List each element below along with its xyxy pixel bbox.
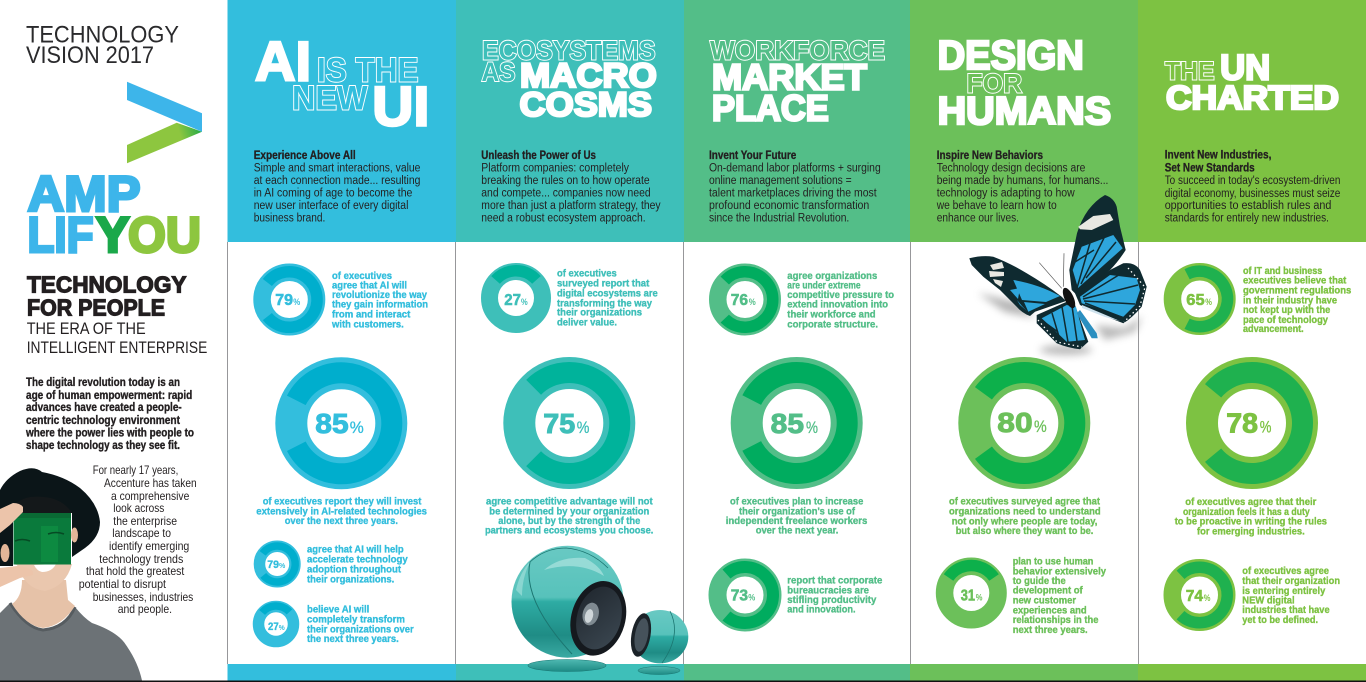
stat text: 78% bbox=[1175, 496, 1327, 537]
body paragraph wrapped around portrait: the enterprise bbox=[113, 514, 177, 528]
heading: technology for people: FOR PEOPLE bbox=[27, 295, 165, 321]
title: AI is the new UI: NEW bbox=[292, 79, 368, 117]
donut: 78% duty to be proactive bbox=[1181, 352, 1323, 494]
illustration: young man in hat holding green square bbox=[0, 468, 142, 680]
text: invent your future: profound economic transformation bbox=[709, 200, 869, 212]
stat text: 31%: new customer bbox=[1013, 595, 1076, 607]
body paragraph wrapped around portrait: a comprehensive bbox=[111, 489, 190, 503]
text: experience above all: business brand. bbox=[254, 213, 325, 225]
title: workforce marketplace: WORKFORCE bbox=[710, 35, 885, 65]
stat text: 27% ecosystems: of executives bbox=[557, 268, 617, 280]
stat text: 27% transform: their organizations over bbox=[307, 624, 414, 636]
panel header: workforce marketplace bbox=[684, 0, 910, 242]
intro statement: shape technology as they see fit. bbox=[26, 440, 180, 452]
stat text: 31%: to guide the bbox=[1013, 575, 1066, 587]
stat text: 31%: development of bbox=[1013, 585, 1083, 597]
donut: 65% government regulations: 65 bbox=[1186, 292, 1205, 309]
intro statement: centric technology environment bbox=[26, 415, 180, 427]
stat text: 75%: alone, but by the strength of the bbox=[498, 515, 640, 527]
donut: 65% government regulations bbox=[1162, 262, 1237, 336]
text: invent new industries: To succeed in today's ecosystem-driven bbox=[1165, 175, 1340, 187]
donut: 74% new digital industries: 74 bbox=[1186, 588, 1203, 605]
amplify you wordmark bbox=[28, 166, 201, 263]
stat text: 27% ecosystems: digital ecosystems are bbox=[557, 288, 658, 300]
body paragraph wrapped around portrait: potential to disrupt bbox=[79, 577, 167, 591]
stat text: 73%: bureaucracies are bbox=[787, 585, 869, 597]
text: invent new industries: Invent New Industries, bbox=[1165, 150, 1271, 162]
stat text: 85%: over the next year. bbox=[756, 525, 838, 537]
title: ecosystems as macrocosms: ECOSYSTEMS bbox=[482, 35, 656, 65]
text: inspire new behaviors: we behave to learn how to bbox=[936, 200, 1057, 212]
stat text: 79% adoption: adoption throughout bbox=[307, 564, 401, 576]
stat text: 76%: corporate structure. bbox=[787, 318, 878, 330]
donut: 27% digital ecosystems: 27 bbox=[504, 292, 521, 309]
body paragraph wrapped around portrait: For nearly 17 years, bbox=[93, 463, 178, 477]
title: the uncharted bbox=[1165, 47, 1339, 117]
stat text: 85% bbox=[726, 496, 868, 537]
stat text: 65%: not kept up with the bbox=[1243, 304, 1330, 316]
stat text: 76%: agree organizations bbox=[787, 270, 877, 282]
donut: 79% adoption bbox=[252, 539, 302, 589]
heading: technology for people: THE ERA OF THE bbox=[27, 319, 146, 338]
illustration: teal speakers bbox=[512, 546, 688, 674]
title: the uncharted: THE bbox=[1165, 58, 1214, 86]
text: unleash the power of us: more than just a platform strategy, they bbox=[481, 200, 661, 212]
title: the uncharted: CHARTED bbox=[1166, 80, 1339, 117]
title: ecosystems as macrocosms bbox=[482, 35, 657, 124]
stat text: 78%: for emerging industries. bbox=[1197, 525, 1305, 537]
body paragraph wrapped around portrait: identify emerging bbox=[109, 539, 189, 553]
stat text: 76% bbox=[787, 270, 894, 330]
title: workforce marketplace: PLACE bbox=[712, 88, 829, 128]
donut: 75% competitive advantage bbox=[498, 352, 641, 494]
stat text: 76%: their workforce and bbox=[787, 309, 876, 321]
text: experience above all bbox=[254, 150, 420, 225]
title: design for humans bbox=[938, 32, 1111, 133]
donut: 85% AI investment: 85 bbox=[315, 408, 349, 439]
text: unleash the power of us: Platform companies: completely bbox=[481, 163, 629, 175]
left column title: VISION 2017 bbox=[26, 42, 154, 69]
text: invent new industries: standards for entirely new industries. bbox=[1165, 213, 1329, 225]
text: inspire new behaviors bbox=[936, 150, 1108, 225]
donut: 73% bureaucracies bbox=[705, 555, 785, 635]
body paragraph wrapped around portrait: that hold the greatest bbox=[86, 564, 185, 578]
intro statement: The digital revolution today is an bbox=[26, 377, 180, 389]
stat text: 85%: of executives plan to increase bbox=[730, 496, 863, 508]
title: AI is the new UI: AI bbox=[255, 30, 311, 92]
text: experience above all: in AI coming of age to become the bbox=[254, 188, 412, 200]
donut: 85% AI investment bbox=[273, 355, 409, 491]
intro statement bbox=[25, 377, 194, 452]
stat text: 65%: pace of technology bbox=[1243, 314, 1328, 326]
donut: 73% bureaucracies: 73 bbox=[731, 588, 748, 605]
donut: 78% duty to be proactive: 78 bbox=[1226, 408, 1258, 439]
donut: 27% digital ecosystems: % bbox=[521, 297, 528, 308]
stat text: 79% bbox=[331, 270, 428, 330]
stat text: 27% ecosystems: transforming the way bbox=[557, 298, 652, 310]
stat text: 80%: organizations need to understand bbox=[949, 506, 1101, 518]
stat text: 65% bbox=[1243, 265, 1351, 335]
heading: technology for people bbox=[27, 271, 207, 357]
stat text: 85%: their organization's use of bbox=[739, 505, 855, 517]
text: unleash the power of us: Unleash the Power of Us bbox=[481, 150, 596, 162]
stat text: 31% bbox=[1013, 556, 1106, 636]
stat text: 80% bbox=[949, 496, 1101, 537]
donut: 85% freelance workers: % bbox=[806, 418, 818, 437]
body paragraph wrapped around portrait: landscape to bbox=[112, 526, 171, 540]
stat text: 74% bbox=[1242, 565, 1340, 626]
title: AI is the new UI bbox=[255, 30, 429, 138]
text: experience above all: Experience Above All bbox=[254, 150, 356, 162]
donut: 76% competitive pressure: 76 bbox=[731, 292, 748, 309]
text: invent your future bbox=[709, 150, 881, 225]
donut: 85% AI investment: % bbox=[350, 418, 364, 437]
text: invent your future: since the Industrial Revolution. bbox=[709, 213, 849, 225]
stat text: 79% adoption: their organizations. bbox=[307, 574, 394, 586]
text: experience above all: Simple and smart interactions, value bbox=[254, 163, 420, 175]
amplify you wordmark: LIF bbox=[28, 207, 94, 263]
donut: 78% duty to be proactive: % bbox=[1260, 418, 1271, 437]
body paragraph wrapped around portrait: Accenture has taken bbox=[104, 476, 197, 490]
donut: 80% understand people: 80 bbox=[997, 407, 1033, 438]
stat text: 73%: and innovation. bbox=[787, 604, 856, 616]
text: unleash the power of us bbox=[481, 150, 661, 225]
amplify you wordmark: OU bbox=[128, 207, 201, 263]
stat text: 80%: of executives surveyed agree that bbox=[949, 496, 1100, 508]
stat text: 27% ecosystems: their organizations bbox=[557, 307, 642, 319]
title: design for humans: FOR bbox=[966, 69, 1022, 99]
text: inspire new behaviors: enhance our lives. bbox=[937, 213, 1019, 225]
stat text: 65%: advancement. bbox=[1243, 323, 1304, 335]
stat text: 85% bbox=[256, 496, 427, 527]
text: invent new industries: digital economy, businesses must seize bbox=[1165, 188, 1340, 200]
amplify you wordmark: AMP bbox=[28, 166, 140, 222]
stat text: 76%: competitive pressure to bbox=[787, 289, 894, 301]
text: invent your future: Invent Your Future bbox=[709, 150, 796, 162]
body paragraph wrapped around portrait: and people. bbox=[118, 602, 172, 616]
stat text: 80%: but also where they want to be. bbox=[956, 525, 1093, 537]
body paragraph wrapped around portrait: technology trends bbox=[99, 552, 183, 566]
stat text: 27% transform: completely transform bbox=[307, 614, 405, 626]
panel header: the uncharted bbox=[1138, 0, 1366, 242]
stat text: 73%: stifling productivity bbox=[787, 594, 876, 606]
donut: 79% AI revolutionize: % bbox=[293, 297, 301, 308]
stat text: 73% bbox=[787, 575, 882, 616]
illustration: blue butterfly bbox=[969, 195, 1147, 355]
donut: 31% human behavior: 31 bbox=[961, 588, 975, 605]
stat text: 27% transform bbox=[307, 604, 414, 645]
intro statement: where the power lies with people to bbox=[25, 428, 194, 440]
text: unleash the power of us: need a robust ecosystem approach. bbox=[481, 213, 646, 225]
panel header: design for humans bbox=[910, 0, 1138, 242]
title: ecosystems as macrocosms: MACRO bbox=[520, 57, 657, 95]
amplify you wordmark: Y bbox=[96, 207, 130, 263]
stat text: 79%: from and interact bbox=[332, 309, 411, 321]
stat text: 85%: independent freelance workers bbox=[726, 515, 868, 527]
donut: 27% transform: 27 bbox=[268, 621, 279, 633]
donut: 65% government regulations: % bbox=[1205, 297, 1212, 308]
title: ecosystems as macrocosms: COSMS bbox=[520, 86, 652, 124]
text: inspire new behaviors: being made by humans, for humans... bbox=[937, 175, 1108, 187]
stat text: 27% ecosystems bbox=[557, 268, 658, 328]
stat text: 75%: agree competitive advantage will not bbox=[486, 496, 653, 508]
text: invent your future: online management solutions = bbox=[709, 175, 852, 187]
stat text: 31%: plan to use human bbox=[1013, 556, 1093, 568]
text: inspire new behaviors: technology is adapting to how bbox=[937, 188, 1075, 200]
stat text: 27% ecosystems: surveyed report that bbox=[557, 278, 650, 290]
stat text: 74%: yet to be defined. bbox=[1242, 614, 1318, 626]
stat text: 79%: of executives bbox=[332, 270, 392, 282]
donut: 80% understand people bbox=[954, 352, 1095, 494]
title: workforce marketplace: MARKET bbox=[712, 56, 867, 98]
donut: 79% AI revolutionize: 79 bbox=[275, 292, 293, 309]
left column title: TECHNOLOGY bbox=[26, 22, 179, 49]
donut: 79% adoption: % bbox=[279, 563, 286, 570]
stat text: 75%: partners and ecosystems you choose. bbox=[485, 525, 653, 537]
title: workforce marketplace bbox=[710, 35, 885, 128]
donut: 74% new digital industries bbox=[1160, 556, 1239, 634]
donut: 73% bureaucracies: % bbox=[748, 593, 756, 604]
donut: 79% AI revolutionize bbox=[250, 261, 328, 338]
donut: 76% competitive pressure bbox=[706, 260, 784, 339]
stat text: 65%: of IT and business bbox=[1243, 265, 1322, 277]
stat text: 27% transform: the next three years. bbox=[307, 633, 399, 645]
donut: 76% competitive pressure: % bbox=[749, 297, 756, 308]
donut: 31% human behavior: % bbox=[976, 593, 983, 604]
panel header: AI is the new UI bbox=[228, 0, 456, 242]
stat text: 78%: organization feels it has a duty bbox=[1183, 506, 1310, 518]
stat text: 27% ecosystems: deliver value. bbox=[557, 316, 617, 328]
stat text: 65%: executives believe that bbox=[1243, 274, 1347, 286]
stat text: 79%: agree that AI will bbox=[332, 280, 407, 292]
stat text: 79%: they gain information bbox=[332, 299, 428, 311]
stat text: 74%: industries that have bbox=[1242, 604, 1330, 616]
body paragraph wrapped around portrait bbox=[79, 463, 197, 616]
stat text: 79%: revolutionize the way bbox=[332, 289, 427, 301]
stat text: 79% adoption bbox=[307, 544, 408, 586]
text: invent your future: On-demand labor platforms + surging bbox=[709, 163, 881, 175]
donut: 79% adoption: 79 bbox=[267, 559, 279, 571]
stat text: 74%: is entering entirely bbox=[1242, 585, 1325, 597]
donut: 27% transform: % bbox=[279, 625, 285, 632]
stat text: 85%: of executives report they will invest bbox=[263, 496, 422, 508]
donut: 85% freelance workers: 85 bbox=[771, 408, 804, 439]
text: invent new industries: opportunities to establish rules and bbox=[1165, 200, 1331, 212]
stat text: 74%: NEW digital bbox=[1242, 594, 1295, 606]
donut: 27% transform bbox=[251, 599, 301, 649]
stat text: 31%: relationships in the bbox=[1013, 614, 1099, 626]
title: design for humans: HUMANS bbox=[938, 90, 1111, 133]
stat text: 79% adoption: accelerate technology bbox=[307, 554, 408, 566]
stat text: 74%: of executives agree bbox=[1242, 565, 1329, 577]
stat text: 65%: government regulations bbox=[1243, 284, 1351, 296]
stat text: 31%: behavior extensively bbox=[1013, 566, 1106, 578]
text: invent new industries: Set New Standards bbox=[1165, 163, 1255, 175]
title: ecosystems as macrocosms: AS bbox=[482, 57, 516, 87]
stat text: 78%: of executives agree that their bbox=[1185, 496, 1316, 508]
text: invent new industries bbox=[1165, 150, 1340, 225]
icon: accenture greater-than arrow bbox=[127, 82, 202, 163]
heading: technology for people: INTELLIGENT ENTERPRISE bbox=[27, 338, 207, 357]
stat text: 65%: in their industry have bbox=[1243, 294, 1337, 306]
donut: 85% freelance workers bbox=[729, 355, 865, 491]
stat text: 31%: next three years. bbox=[1013, 624, 1088, 636]
stat text: 80%: not only where people are today, bbox=[952, 515, 1097, 527]
stat text: 79% adoption: agree that AI will help bbox=[307, 544, 404, 556]
left column title bbox=[26, 22, 179, 69]
text: unleash the power of us: breaking the rules on to how operate bbox=[481, 175, 650, 187]
title: AI is the new UI: UI bbox=[372, 75, 429, 138]
stat text: 85%: over the next three years. bbox=[285, 515, 398, 527]
donut: 75% competitive advantage: % bbox=[577, 418, 589, 437]
footer colour band bbox=[228, 664, 1366, 680]
stat text: 85%: extensively in AI-related technologies bbox=[256, 505, 427, 517]
donut: 31% human behavior bbox=[933, 555, 1010, 631]
donut: 80% understand people: % bbox=[1034, 417, 1047, 436]
title: AI is the new UI: IS THE bbox=[317, 51, 418, 89]
body paragraph wrapped around portrait: look across bbox=[113, 501, 164, 515]
text: unleash the power of us: and compete... companies now need bbox=[481, 188, 651, 200]
title: design for humans: DESIGN bbox=[938, 32, 1084, 78]
stat text: 75%: be determined by your organization bbox=[489, 505, 649, 517]
text: experience above all: new user interface of every digital bbox=[254, 200, 408, 212]
panel header: ecosystems as macrocosms bbox=[456, 0, 684, 242]
stat text: 31%: experiences and bbox=[1013, 604, 1087, 616]
text: invent your future: talent marketplaces driving the most bbox=[709, 188, 877, 200]
stat text: 27% transform: believe AI will bbox=[307, 604, 369, 616]
stat text: 78%: to be proactive in writing the rules bbox=[1175, 515, 1327, 527]
donut: 27% digital ecosystems bbox=[478, 260, 554, 336]
intro statement: advances have created a people- bbox=[26, 402, 182, 414]
text: experience above all: at each connection made... resulting bbox=[254, 175, 420, 187]
donut: 75% competitive advantage: 75 bbox=[543, 408, 575, 439]
title: the uncharted: UN bbox=[1220, 47, 1270, 87]
heading: technology for people: TECHNOLOGY bbox=[27, 271, 186, 297]
stat text: 79%: with customers. bbox=[331, 318, 404, 330]
body paragraph wrapped around portrait: businesses, industries bbox=[93, 590, 193, 604]
stat text: 74%: that their organization bbox=[1242, 575, 1340, 587]
text: inspire new behaviors: Inspire New Behaviors bbox=[937, 150, 1043, 162]
stat text: 76%: are under extreme bbox=[787, 280, 861, 292]
donut: 74% new digital industries: % bbox=[1204, 593, 1211, 604]
text: inspire new behaviors: Technology design decisions are bbox=[937, 163, 1085, 175]
stat text: 76%: extend innovation into bbox=[787, 299, 888, 311]
stat text: 73%: report that corporate bbox=[787, 575, 882, 587]
intro statement: age of human empowerment: rapid bbox=[26, 390, 192, 402]
stat text: 75% bbox=[485, 496, 653, 537]
